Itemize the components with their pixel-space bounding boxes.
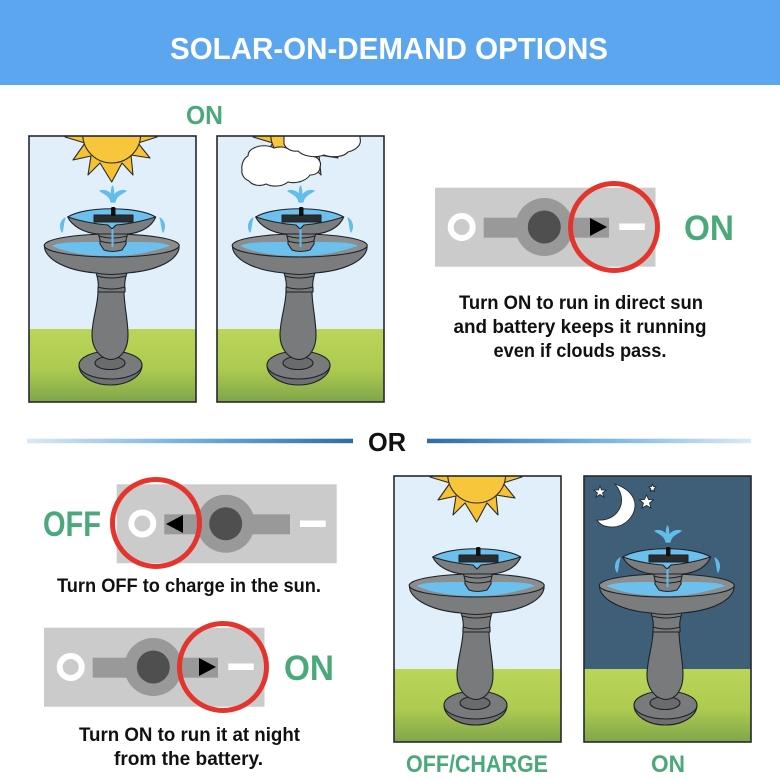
text: direct sun instructions: even if clouds pass.	[494, 341, 666, 362]
text: night instructions: Turn ON to run it at night	[79, 725, 301, 746]
label: ON night: ON	[651, 751, 685, 778]
text: direct sun instructions: Turn ON to run in direct sun	[459, 293, 703, 314]
text: charge instruction: Turn OFF to charge in the sun.	[57, 576, 321, 597]
icon: clouds	[241, 136, 361, 187]
panel: fountain in direct sun	[29, 105, 196, 402]
panel: fountain off charging	[394, 445, 561, 742]
text: night instructions: from the battery.	[114, 749, 263, 770]
label: ON switch top: ON	[684, 209, 734, 248]
panel: fountain on at night	[584, 476, 751, 742]
text: direct sun instructions	[454, 293, 706, 362]
divider with OR	[27, 427, 751, 457]
header banner	[0, 0, 780, 85]
label: OFF/CHARGE: OFF/CHARGE	[406, 751, 548, 778]
text: direct sun instructions: and battery keeps it running	[454, 317, 706, 338]
switch: ON position night	[44, 624, 266, 710]
switch: OFF position	[112, 480, 337, 566]
icon: moon and stars	[594, 484, 656, 527]
text: night instructions	[79, 725, 301, 770]
divider with OR: OR	[368, 427, 406, 457]
label: ON switch night: ON	[284, 649, 334, 688]
label: OFF switch: OFF	[43, 505, 101, 544]
title: SOLAR-ON-DEMAND OPTIONS	[170, 31, 608, 66]
label: ON top: ON	[186, 100, 223, 130]
switch: ON position top	[435, 184, 658, 270]
panel: fountain with clouds passing	[217, 105, 384, 402]
